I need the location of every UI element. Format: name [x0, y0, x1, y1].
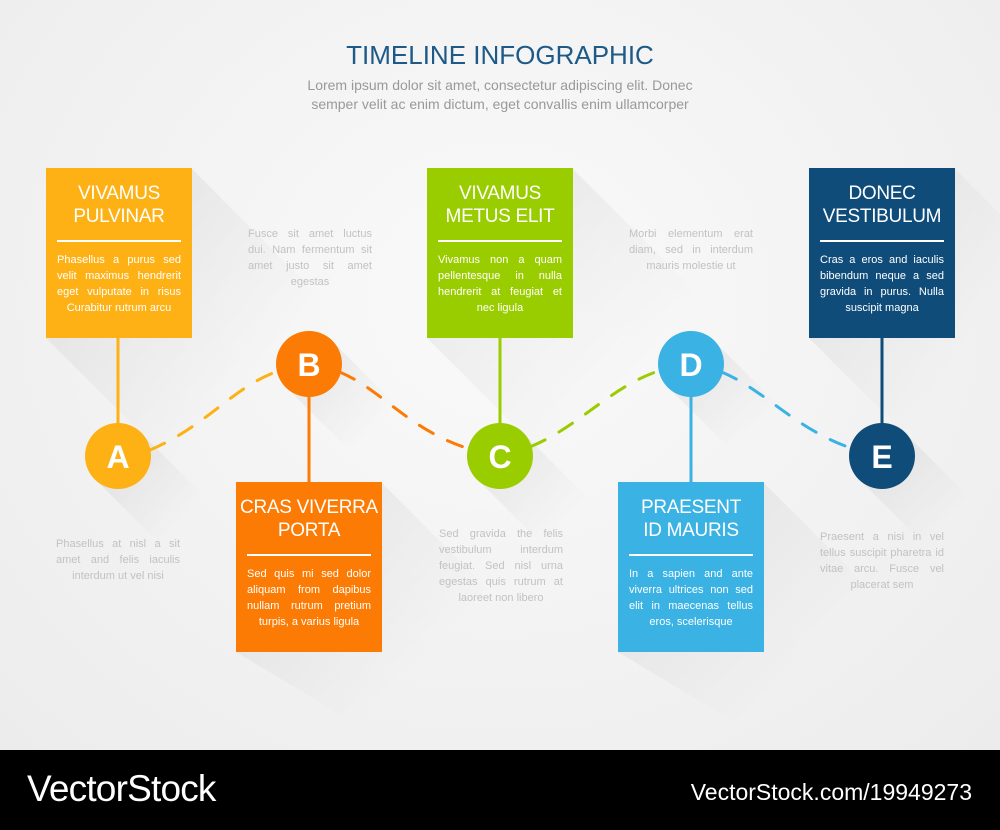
stems: [118, 338, 882, 482]
box E: VESTIBULUM: [823, 206, 941, 227]
gray text 1: Fusce sit amet luctus dui. Nam fermentum sit amet justo sit amet egestas: [248, 228, 372, 288]
box E: [809, 168, 955, 338]
footer url: VectorStock.com/19949273: [691, 779, 972, 805]
gray text 3: Phasellus at nisl a sit amet and felis iaculis interdum ut vel nisi: [56, 538, 180, 582]
circle A: [85, 423, 151, 489]
circles: [85, 331, 915, 489]
footer logo: VectorStock: [27, 768, 216, 809]
title: TIMELINE INFOGRAPHIC: [346, 40, 654, 70]
gray text 2: Morbi elementum erat diam, sed in interdum mauris molestie ut: [629, 228, 753, 272]
box A: PULVINAR: [73, 206, 165, 227]
box E: DONEC: [848, 183, 916, 204]
circle E: [849, 423, 915, 489]
circle D: [658, 331, 724, 397]
gray text 4: Sed gravida the felis vestibulum interdum feugiat. Sed nisl urna egestas quis rutrum at laoreet non libero: [439, 528, 563, 604]
subtitle: semper velit ac enim dictum, eget convallis enim ullamcorper: [311, 96, 689, 112]
box E: Cras a eros and iaculis bibendum neque a sed gravida in purus. Nulla suscipit magna: [820, 254, 944, 314]
box D: In a sapien and ante viverra ultrices non sed elit in maecenas tellus eros, scelerisque: [629, 568, 753, 628]
box C: VIVAMUS: [459, 183, 541, 204]
box A: VIVAMUS: [78, 183, 160, 204]
box C: [427, 168, 573, 338]
box B: CRAS VIVERRA: [240, 497, 378, 518]
subtitle: Lorem ipsum dolor sit amet, consectetur adipiscing elit. Donec: [307, 77, 693, 93]
circle C: C: [488, 439, 512, 475]
circle A: A: [106, 439, 130, 475]
box B: Sed quis mi sed dolor aliquam from dapibus nullam rutrum pretium turpis, a varius ligula: [247, 568, 371, 628]
box C: Vivamus non a quam pellentesque in nulla hendrerit at feugiat et nec ligula: [438, 254, 562, 314]
circle E: E: [871, 439, 893, 475]
box D: [618, 482, 764, 652]
dashed curve: [150, 364, 882, 456]
gray text 5: Praesent a nisi in vel tellus suscipit pharetra id vitae arcu. Fusce vel placerat sem: [820, 531, 944, 591]
circle B: [276, 331, 342, 397]
circle D: D: [679, 347, 703, 383]
subtitle: [307, 77, 693, 112]
circle B: B: [297, 347, 321, 383]
box A: Phasellus a purus sed velit maximus hendrerit eget vulputate in risus Curabitur rutrum arcu: [57, 254, 181, 314]
box D: PRAESENT: [641, 497, 741, 518]
circle C: [467, 423, 533, 489]
box B: PORTA: [278, 520, 340, 541]
box D: ID MAURIS: [643, 520, 739, 541]
box A: [46, 168, 192, 338]
box C: METUS ELIT: [446, 206, 554, 227]
box B: [236, 482, 382, 652]
footer: [0, 750, 1000, 830]
